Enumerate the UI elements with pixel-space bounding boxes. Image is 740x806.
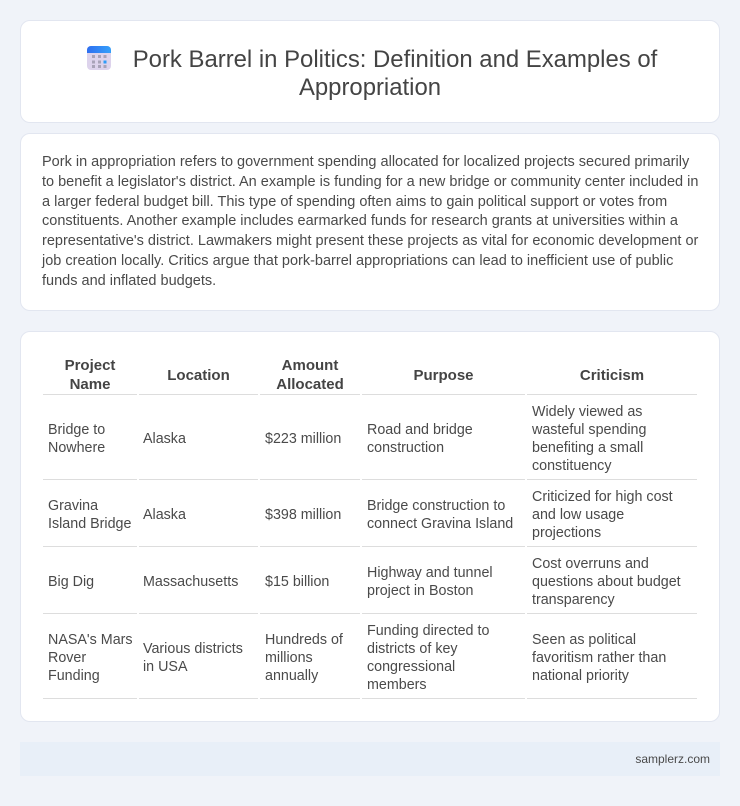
row: NASA's Mars Rover Funding: national priority	[532, 668, 629, 684]
table header: Name	[70, 376, 110, 393]
row: Gravina Island Bridge: Alaska	[143, 507, 186, 523]
title: Pork Barrel in Politics: Definition and Examples of	[133, 46, 657, 73]
row: Gravina Island Bridge: Gravina	[48, 498, 98, 514]
row: NASA's Mars Rover Funding	[43, 623, 697, 699]
row: Gravina Island Bridge: Bridge construction to	[367, 498, 505, 514]
row: NASA's Mars Rover Funding: Funding directed to	[367, 623, 489, 639]
row: Big Dig: questions about budget	[532, 574, 681, 590]
row: Bridge to Nowhere: construction	[367, 440, 444, 456]
row: Big Dig: Cost overruns and	[532, 556, 649, 572]
row: NASA's Mars Rover Funding: Hundreds of	[265, 632, 343, 648]
row: NASA's Mars Rover Funding: Funding	[48, 668, 100, 684]
row: Bridge to Nowhere	[43, 404, 697, 480]
row: NASA's Mars Rover Funding: annually	[265, 668, 318, 684]
row: NASA's Mars Rover Funding: Rover	[48, 650, 86, 666]
table header: Location	[167, 367, 230, 384]
table header: Amount	[282, 357, 338, 374]
row: Big Dig	[43, 556, 697, 614]
row: NASA's Mars Rover Funding: millions	[265, 650, 313, 666]
row: Gravina Island Bridge: connect Gravina Island	[367, 516, 513, 532]
row: Big Dig: Big Dig	[48, 574, 94, 590]
row: NASA's Mars Rover Funding: favoritism rather than	[532, 650, 666, 666]
row: NASA's Mars Rover Funding: districts of key	[367, 641, 458, 657]
table header: Project	[65, 357, 115, 374]
description text	[42, 154, 698, 289]
row: Bridge to Nowhere: Alaska	[143, 431, 186, 447]
row: Big Dig: project in Boston	[367, 583, 474, 599]
header panel	[20, 20, 720, 123]
row: Big Dig: Highway and tunnel	[367, 565, 493, 581]
table header: Criticism	[580, 367, 644, 384]
row: Gravina Island Bridge: Island Bridge	[48, 516, 131, 532]
row: Gravina Island Bridge: $398 million	[265, 507, 341, 523]
title: Appropriation	[299, 74, 441, 101]
table header	[43, 357, 697, 395]
panel: table	[20, 331, 720, 722]
row: Gravina Island Bridge: projections	[532, 525, 601, 541]
description text: funds and inflated budgets.	[42, 273, 216, 289]
row: Bridge to Nowhere: Bridge to	[48, 422, 105, 438]
row: NASA's Mars Rover Funding: Various districts	[143, 641, 243, 657]
row: Gravina Island Bridge	[43, 489, 697, 547]
row: Bridge to Nowhere: Road and bridge	[367, 422, 473, 438]
description text: job creation locally. Critics argue that pork-barrel appropriations can lead to inefficient use of public	[42, 253, 673, 269]
row: Bridge to Nowhere: Widely viewed as	[532, 404, 642, 420]
row: NASA's Mars Rover Funding: Seen as political	[532, 632, 636, 648]
row: Bridge to Nowhere: Nowhere	[48, 440, 105, 456]
table header: Purpose	[413, 367, 474, 384]
row: Bridge to Nowhere: $223 million	[265, 431, 341, 447]
description text: Pork in appropriation refers to government spending allocated for localized projects secured primarily	[42, 154, 689, 170]
table header: Allocated	[276, 376, 344, 393]
row: NASA's Mars Rover Funding: NASA's Mars	[48, 632, 133, 648]
row: Bridge to Nowhere: wasteful spending	[532, 422, 646, 438]
row: Bridge to Nowhere: benefiting a small	[532, 440, 643, 456]
footer bar	[20, 742, 720, 776]
description text: constituents. Another example includes earmarked funds for research grants at universities within a	[42, 213, 678, 229]
description text: to benefit a legislator's district. An example is funding for a new bridge or community center included in	[42, 174, 698, 190]
icon: calendar	[87, 46, 111, 70]
description text: a larger federal budget bill. This type of spending often aims to gain political support or votes from	[42, 194, 667, 210]
row: Gravina Island Bridge: Criticized for high cost	[532, 489, 673, 505]
panel: description	[20, 133, 720, 311]
footer text: samplerz.com	[635, 752, 710, 766]
title	[133, 46, 658, 101]
row: NASA's Mars Rover Funding: in USA	[143, 659, 188, 675]
row: Gravina Island Bridge: and low usage	[532, 507, 624, 523]
row: Big Dig: $15 billion	[265, 574, 329, 590]
row: Big Dig: Massachusetts	[143, 574, 238, 590]
row: Big Dig: transparency	[532, 592, 615, 608]
row: NASA's Mars Rover Funding: congressional	[367, 659, 455, 675]
row: NASA's Mars Rover Funding: members	[367, 677, 427, 693]
row: Bridge to Nowhere: constituency	[532, 458, 611, 474]
description text: representative's district. Lawmakers might present these projects as vital for economic development or	[42, 233, 698, 249]
table	[43, 357, 697, 699]
